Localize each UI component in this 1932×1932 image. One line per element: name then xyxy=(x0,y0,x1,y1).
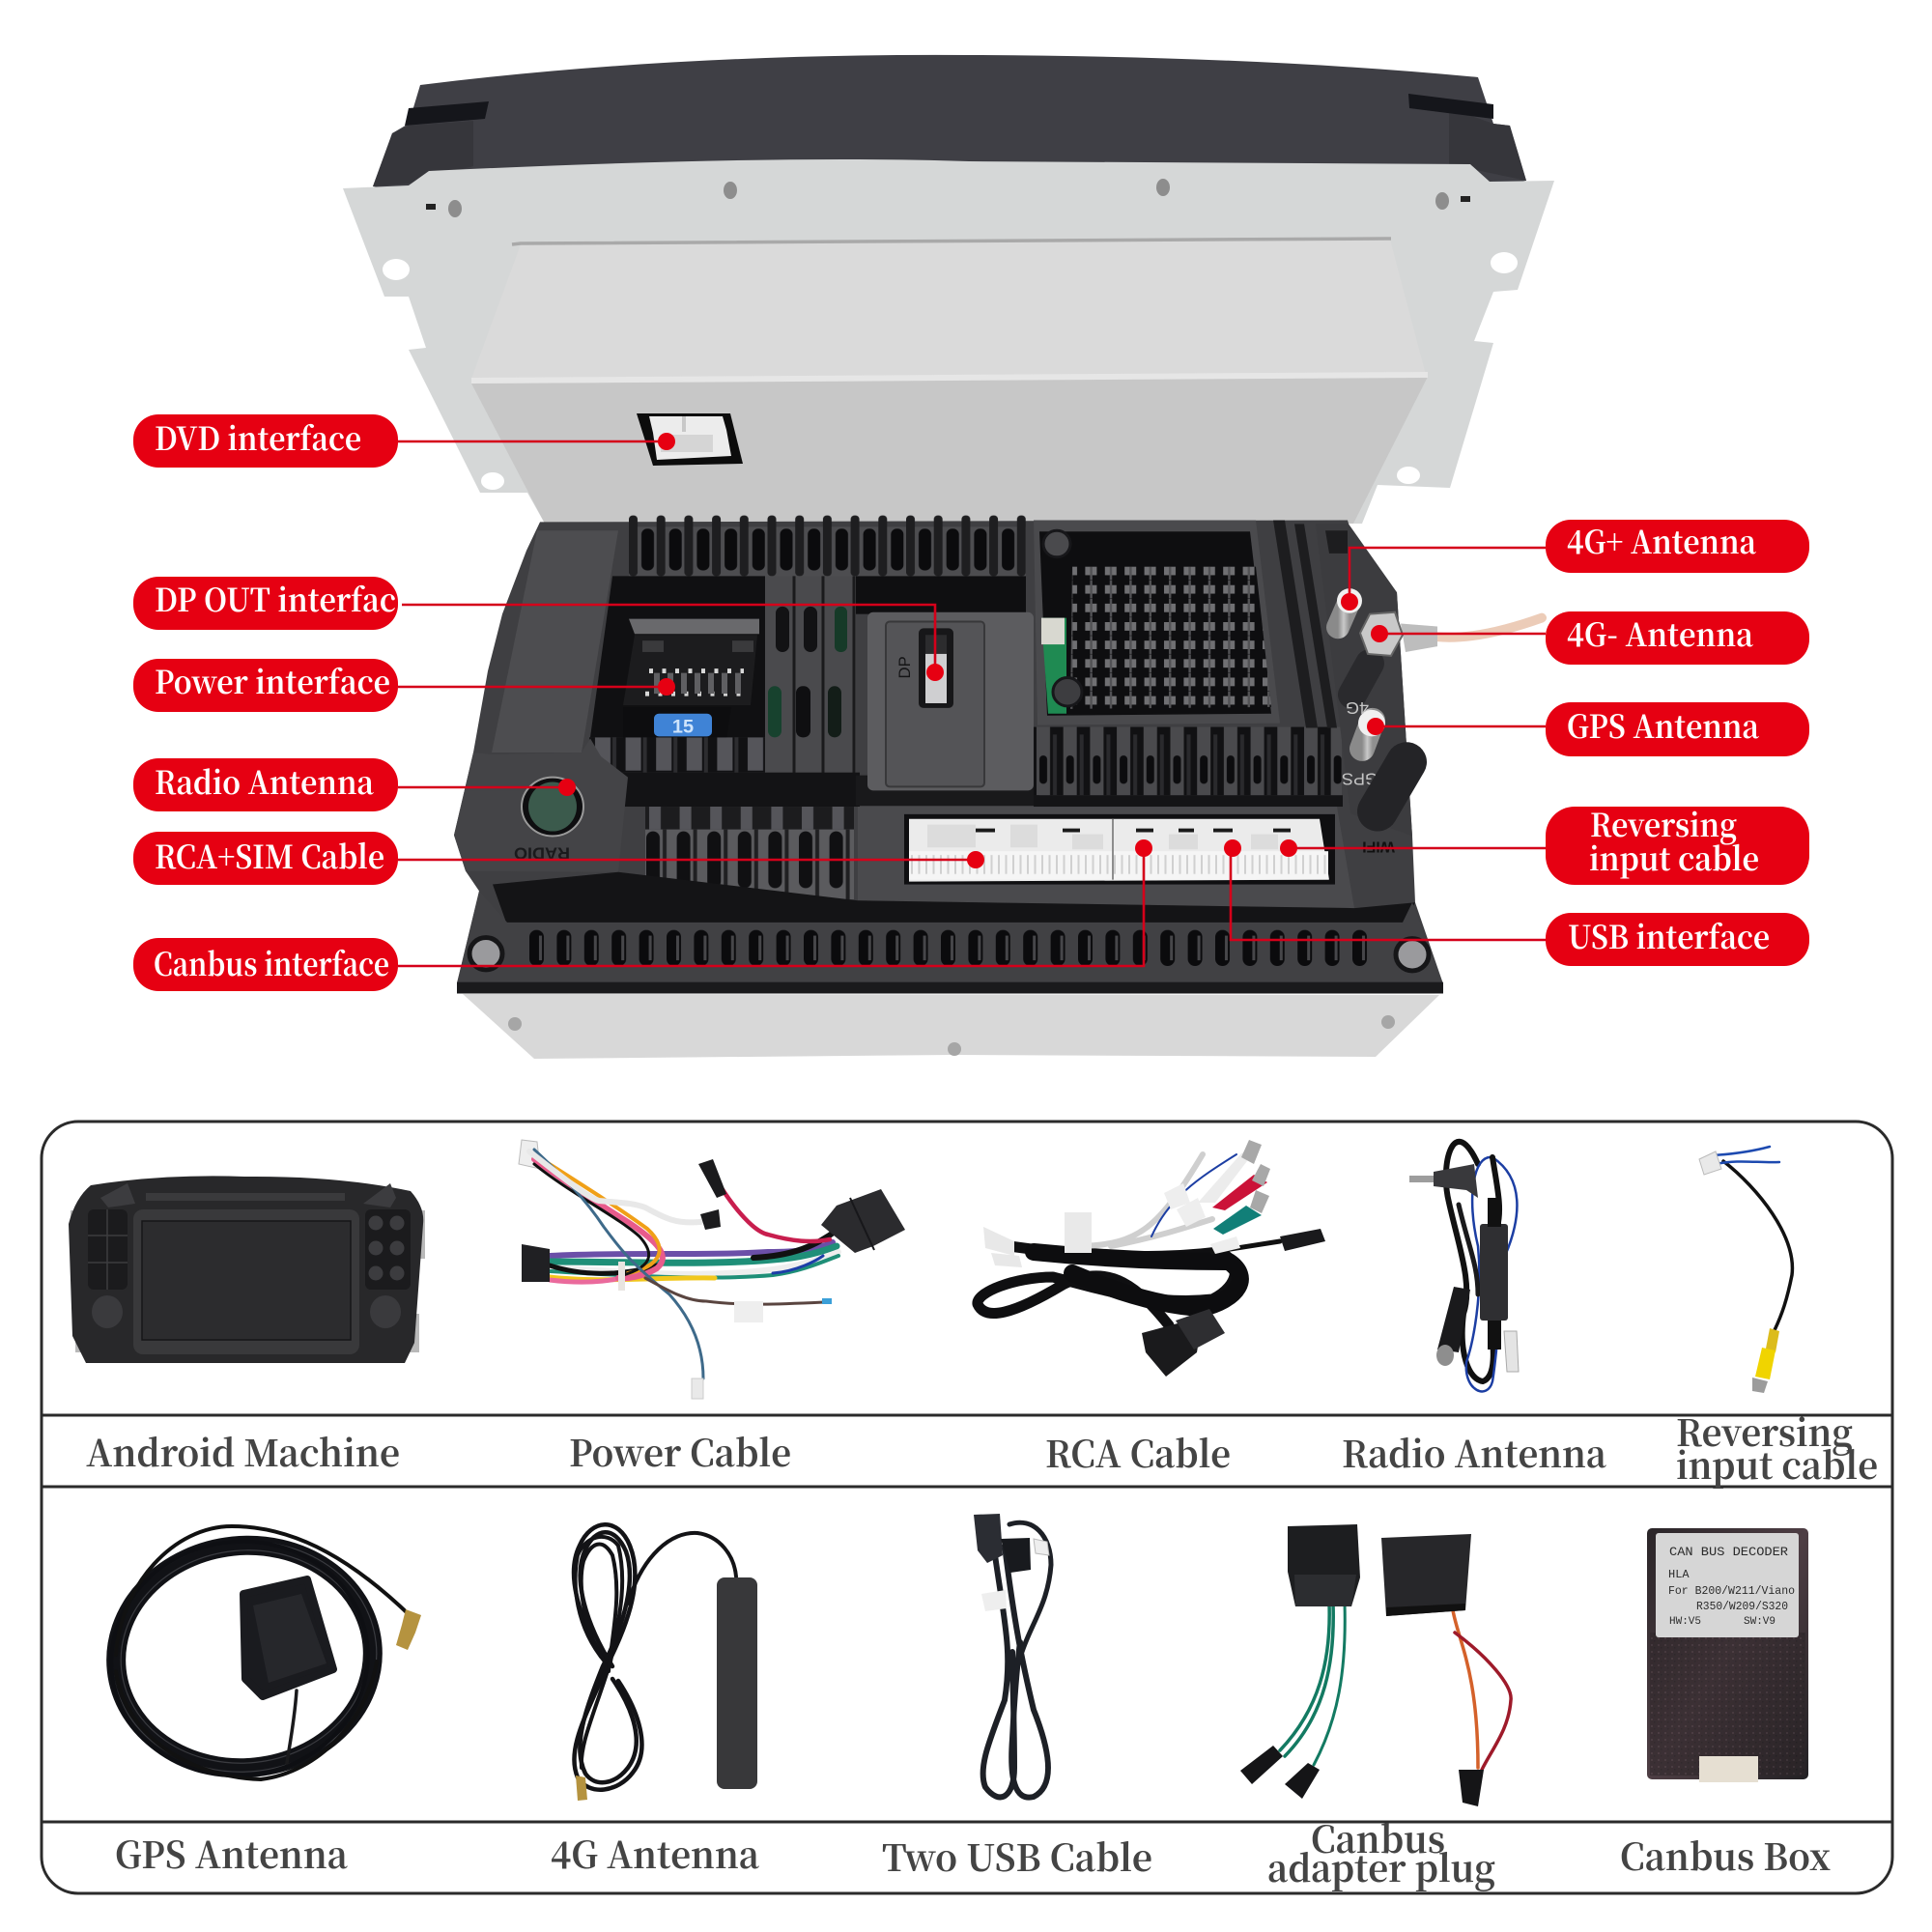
callout: DP OUT interface xyxy=(133,576,944,681)
item: Canbus box xyxy=(1647,1528,1808,1782)
item: Canbus box: CAN BUS DECODER xyxy=(1669,1545,1788,1559)
radio block xyxy=(454,738,628,872)
label: Canbus adapter plug: adapter plug xyxy=(1267,1839,1495,1892)
label: RCA Cable: RCA Cable xyxy=(1045,1425,1231,1478)
callout: GPS Antenna: GPS Antenna xyxy=(1567,702,1760,748)
callout: Power interface xyxy=(133,658,675,712)
dp block xyxy=(867,612,1034,790)
device: main unit rear panel xyxy=(454,514,1542,993)
left panel block xyxy=(492,530,618,753)
callout: GPS Antenna xyxy=(1367,702,1809,756)
panel: accessories table xyxy=(42,1122,1892,1893)
item: Canbus box: HLA xyxy=(1668,1568,1690,1581)
label: Reversing input cable: Reversing xyxy=(1676,1404,1853,1457)
label: Canbus Box: Canbus Box xyxy=(1620,1828,1831,1881)
item: 4G antenna xyxy=(574,1524,757,1801)
device back: metal plate and dark housing xyxy=(343,55,1554,524)
antenna connectors xyxy=(1437,618,1542,638)
item: Android machine xyxy=(69,1176,425,1363)
item: Canbus box: SW:V9 xyxy=(1744,1616,1776,1628)
label: 4G Antenna: 4G Antenna xyxy=(551,1826,760,1879)
radio socket xyxy=(522,778,583,836)
callout: 4G- Antenna xyxy=(1371,611,1809,665)
dark top housing xyxy=(373,55,1526,203)
dp recess xyxy=(856,576,1026,614)
callout: Power interface: Power interface xyxy=(155,658,390,703)
device: main unit rear panel: DP xyxy=(895,656,914,678)
callout: USB interface xyxy=(1224,839,1809,966)
vertical fin band xyxy=(765,576,856,776)
heatsink xyxy=(1034,520,1280,725)
label: Canbus adapter plug: Canbus xyxy=(1311,1810,1445,1863)
callout: Radio Antenna xyxy=(133,758,576,811)
metal plate xyxy=(343,159,1554,524)
device: main unit rear panel: RADIO xyxy=(514,843,570,863)
item: Radio antenna cable xyxy=(1409,1142,1519,1391)
connector strip xyxy=(1316,524,1412,836)
callout: DVD interface: DVD interface xyxy=(155,414,361,460)
connector bay xyxy=(858,807,1354,908)
label: Radio Antenna: Radio Antenna xyxy=(1342,1425,1607,1478)
label: GPS Antenna: GPS Antenna xyxy=(115,1826,349,1879)
device: main unit rear panel: WIFI xyxy=(1362,838,1395,854)
label: Power Cable: Power Cable xyxy=(569,1424,791,1477)
callout: 4G+ Antenna xyxy=(1341,518,1809,611)
item: Two USB cable xyxy=(974,1514,1051,1798)
device: main unit rear panel: GPS xyxy=(1342,770,1378,789)
item: Power cable xyxy=(519,1140,905,1399)
callout: Radio Antenna: Radio Antenna xyxy=(155,758,375,804)
callout: Reversing input cable: input cable xyxy=(1589,835,1759,880)
lower fin block xyxy=(645,807,854,899)
top fin row xyxy=(629,526,1026,578)
fin row under heatsink xyxy=(1034,727,1342,795)
white connector xyxy=(909,819,1329,882)
label: Android Machine: Android Machine xyxy=(86,1424,400,1477)
item: Canbus box: R350/W209/S320 xyxy=(1696,1600,1788,1613)
lower tray xyxy=(457,891,1443,984)
item: Canbus adapter plug xyxy=(1240,1524,1511,1806)
shadow band xyxy=(493,872,1415,925)
callout: Canbus interface: Canbus interface xyxy=(154,940,389,985)
callout: 4G+ Antenna: 4G+ Antenna xyxy=(1567,518,1757,563)
callout: 4G- Antenna: 4G- Antenna xyxy=(1567,611,1754,656)
item: Canbus box: For B200/W211/Viano xyxy=(1668,1584,1795,1598)
callout: DVD interface xyxy=(133,414,675,468)
callout: Canbus interface xyxy=(133,839,1152,991)
dvd socket xyxy=(637,413,743,466)
callout: USB interface: USB interface xyxy=(1568,913,1770,958)
item: Reversing cable xyxy=(1699,1147,1792,1393)
short fin row xyxy=(589,737,765,773)
item: RCA cable xyxy=(978,1140,1325,1377)
device: main unit rear panel: 15 xyxy=(672,717,694,737)
power recess xyxy=(590,576,765,737)
side fins xyxy=(1273,520,1318,728)
callout: Reversing input cable: Reversing xyxy=(1590,801,1737,846)
item: Canbus box: HW:V5 xyxy=(1669,1616,1701,1628)
device: lower metal tray xyxy=(463,994,1439,1059)
label: Reversing input cable: input cable xyxy=(1676,1436,1878,1490)
callout: RCA+SIM Cable: RCA+SIM Cable xyxy=(155,833,384,878)
label: Canbus adapter plug xyxy=(1267,1810,1495,1892)
callout: DP OUT interface: DP OUT interfac xyxy=(155,576,396,621)
callout: RCA+SIM Cable xyxy=(133,832,984,885)
device: main unit rear panel: 4G xyxy=(1346,698,1369,718)
fuse xyxy=(623,707,731,739)
item: GPS antenna xyxy=(96,1525,421,1792)
label: Reversing input cable xyxy=(1676,1404,1878,1490)
callout: Reversing input cable xyxy=(1280,801,1809,885)
label: Two USB Cable: Two USB Cable xyxy=(882,1829,1152,1882)
